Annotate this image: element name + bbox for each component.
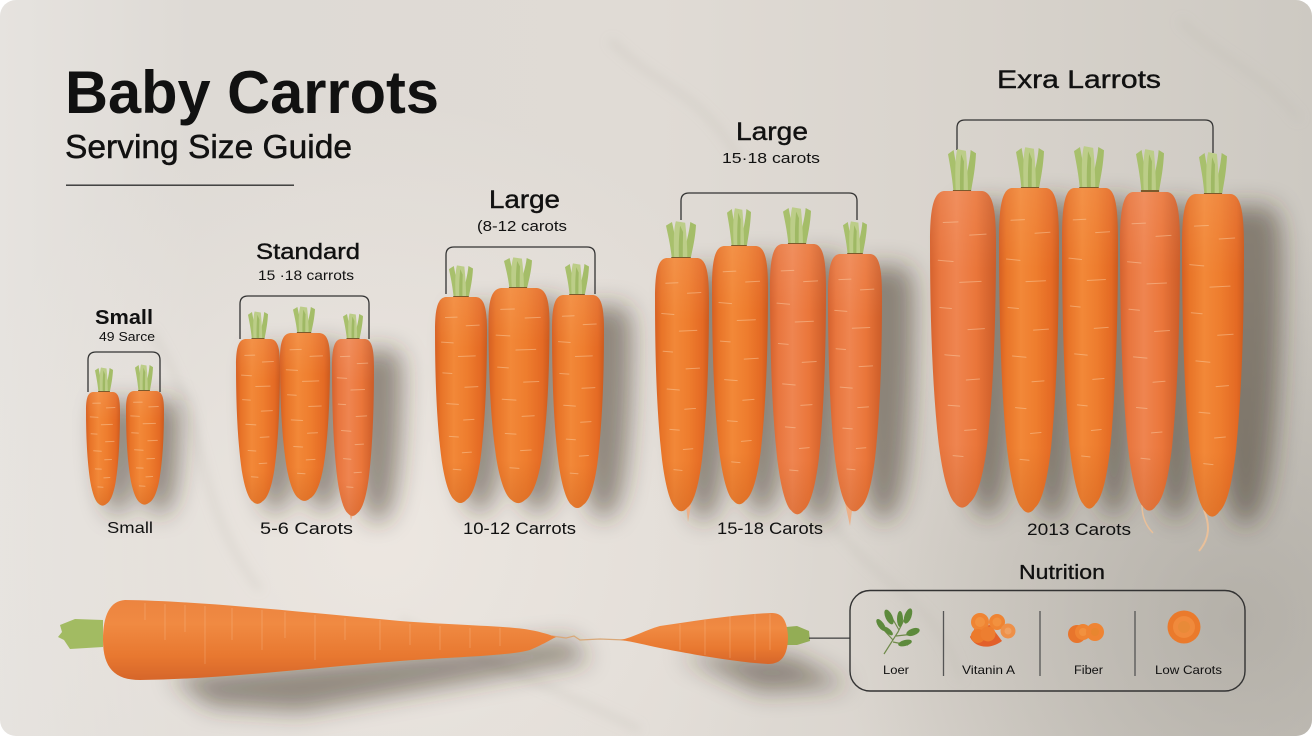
horizontal carrot: [58, 600, 850, 680]
icon: carrot round: [1168, 610, 1200, 644]
bracket: extra large: [957, 120, 1213, 153]
group: large 10-12: [435, 186, 604, 538]
label: vitamin a: Vitanin A: [962, 663, 1015, 677]
subtitle: Serving Size Guide: [65, 128, 352, 165]
heading: standard: Standard: [256, 239, 360, 264]
label: extra large: 2013 Carots: [1027, 520, 1131, 539]
heading: extra large: Exra Larrots: [997, 66, 1161, 94]
carrots: large: [435, 257, 604, 508]
label: 10-12: 10-12 Carrots: [463, 519, 576, 538]
label: small: Small: [107, 520, 153, 537]
carrots: large 2: [655, 207, 882, 526]
horizontal carrot: short piece: [620, 613, 788, 664]
count: standard: 15 ·18 carrots: [258, 267, 354, 283]
heading: large 2: Large: [736, 118, 808, 146]
group: standard: [236, 239, 374, 538]
bracket: small: [88, 352, 160, 392]
label: loer: Loer: [883, 665, 909, 677]
horizontal carrot: right greens: [786, 626, 810, 645]
label: 15-18: 15-18 Carots: [717, 519, 823, 538]
icon: fiber slices: [1068, 623, 1104, 643]
bracket: standard: [240, 296, 369, 339]
label: low carots: Low Carots: [1155, 663, 1222, 677]
horizontal carrot: thread: [552, 636, 625, 640]
carrots: small: [86, 364, 164, 506]
nutrition box: [850, 590, 1245, 691]
panel: nutrition: [850, 562, 1245, 691]
heading: large: Large: [489, 186, 560, 214]
horizontal carrot: left greens: [58, 619, 103, 649]
dividers: [944, 611, 1135, 676]
icon: vitamin a slices: [970, 613, 1016, 647]
count: large 2: 15·18 carots: [722, 150, 820, 167]
carrots: extra large: [930, 146, 1244, 551]
count: small: 49 Sarce: [99, 329, 155, 344]
group: large 15-18: [655, 118, 882, 538]
icon: parsley: [875, 607, 921, 654]
carrots: standard: [236, 306, 374, 520]
horizontal carrot: long piece: [103, 600, 556, 680]
bracket: large 2: [681, 193, 857, 220]
label: standard: 5-6 Carots: [260, 520, 353, 538]
group: small: [86, 307, 164, 537]
title rule: [66, 184, 294, 186]
carrot shadows: [99, 200, 1282, 712]
group: extra large: [930, 66, 1244, 551]
count: large: (8-12 carots: [477, 218, 567, 235]
heading: small: Small: [95, 307, 153, 329]
bracket: large: [446, 247, 595, 294]
title: Baby Carrots: [65, 59, 439, 126]
nutrition heading: Nutrition: [1019, 562, 1105, 584]
connector line: [809, 638, 850, 639]
title block: [65, 59, 439, 186]
label: fiber: Fiber: [1074, 665, 1103, 677]
